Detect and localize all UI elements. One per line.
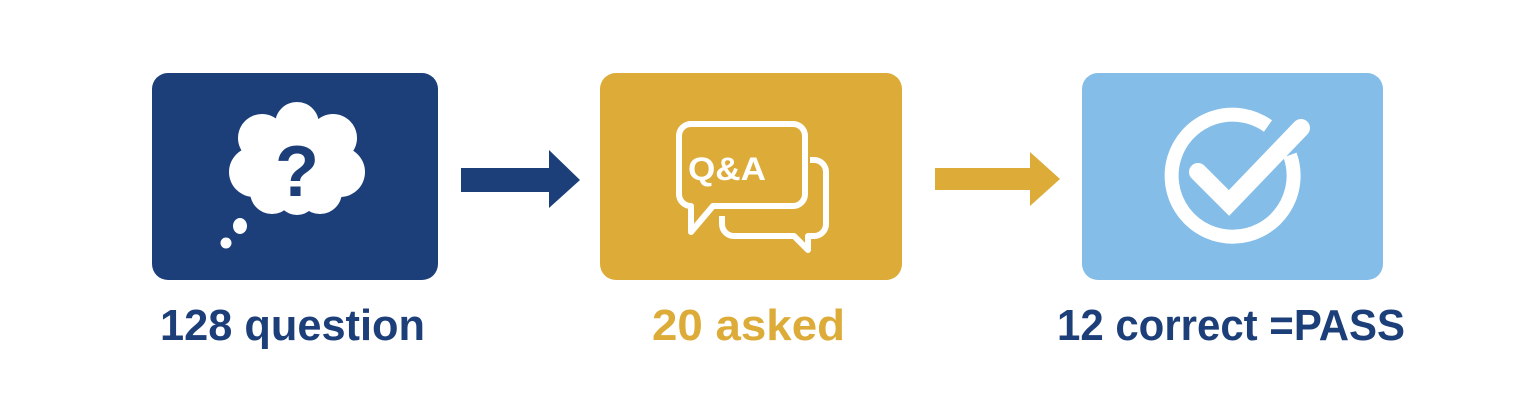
- panel: Q&A: [600, 73, 902, 280]
- arrow 2: [935, 152, 1060, 206]
- icon: speech bubbles: Q&A: [688, 151, 766, 187]
- panel: pass: [1082, 73, 1383, 280]
- label: 12 correct = PASS: 12 correct =PASS: [1057, 301, 1405, 350]
- icon: check circle: [1172, 115, 1301, 237]
- arrow 1: [461, 150, 580, 208]
- panel: question bank: [152, 73, 438, 280]
- label: 128 question: 128 question: [160, 301, 425, 350]
- icon: speech bubbles: [679, 124, 826, 250]
- label: 20 asked: 20 asked: [652, 301, 845, 350]
- icon: thought cloud with question mark: ?: [275, 132, 319, 212]
- icon: thought cloud with question mark: [220, 102, 365, 248]
